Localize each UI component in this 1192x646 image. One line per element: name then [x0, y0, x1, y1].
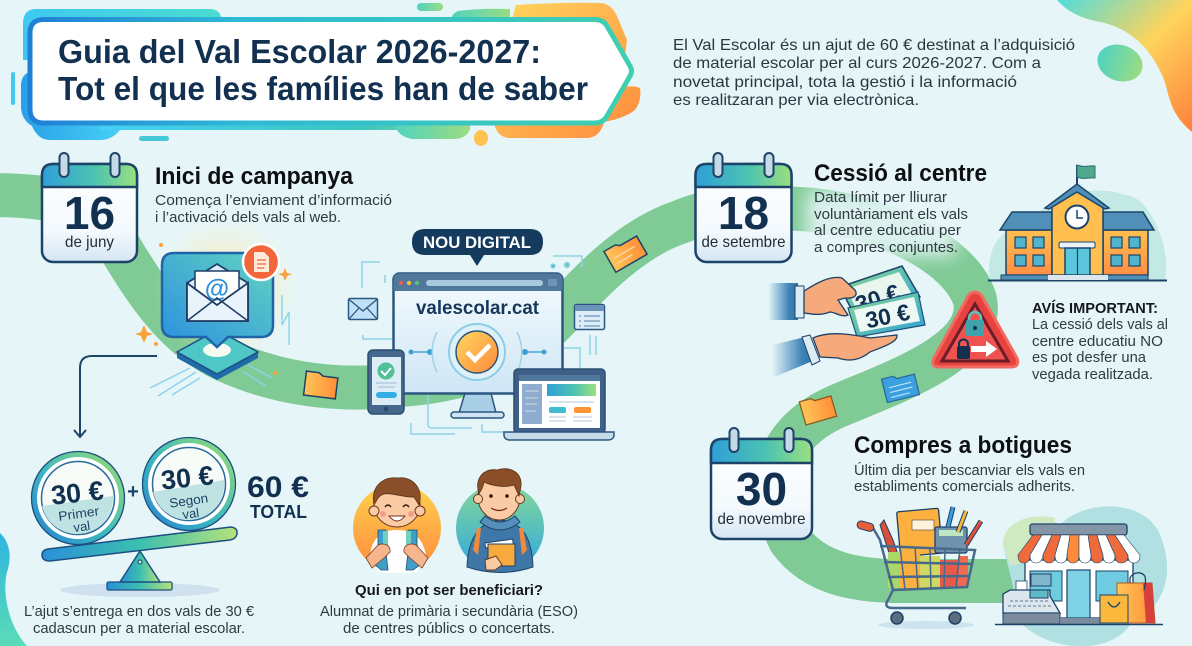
text: Compres a botigues description: Últim dia per bescanviar els vals en: [854, 462, 1085, 479]
title text: Tot el que les famílies han de saber: [58, 70, 588, 107]
illustration: hands exchanging vouchers: [768, 266, 925, 378]
seesaw: [42, 527, 237, 597]
total: 60 €: TOTAL: [250, 502, 307, 522]
title banner: [11, 3, 640, 146]
decorative blob: top right corner: [1057, 0, 1192, 132]
calendar: 18 de setembre: 18: [718, 187, 769, 239]
text: avís important: centre educatiu NO: [1032, 333, 1163, 350]
desktop monitor: [394, 274, 562, 418]
voucher: segon val: val: [182, 505, 200, 522]
illustration: seesaw with vouchers: [32, 438, 237, 597]
decorative blob: bottom left corner: [0, 533, 27, 646]
voucher: primer val: 30 €: [50, 475, 105, 511]
text: Cessió al centre description: al centre educatiu per: [814, 222, 961, 239]
envelope: @: [205, 275, 229, 303]
heading: Compres a botigues: Compres a botigues: [854, 432, 1072, 459]
network connectors: [362, 256, 596, 434]
calendar: 18 de setembre: [696, 153, 792, 262]
callout: NOU DIGITAL: [412, 229, 543, 266]
back voucher: [840, 266, 920, 322]
calendar: 18 de setembre: de setembre: [702, 234, 786, 251]
envelope: [187, 264, 248, 321]
title decorative shapes: [11, 3, 640, 146]
text: vouchers caption: [24, 603, 255, 637]
cart frame: [873, 528, 975, 608]
phone: [368, 350, 404, 414]
icon: small window: [574, 304, 604, 330]
total: 60 €: 60 €: [247, 471, 309, 504]
voucher: segon val: 30 €: [160, 460, 215, 496]
calendar: 30 de novembre: de novembre: [718, 511, 806, 528]
voucher: segon val: Segon: [168, 490, 209, 511]
dark lock: [957, 340, 970, 359]
icon: small envelope: [348, 298, 378, 320]
check badge: [408, 324, 546, 380]
text: Inici de campanya description: [155, 192, 392, 226]
text: vouchers caption: cadascun per a material escolar.: [33, 620, 245, 637]
illustration: secondary school child: [456, 469, 544, 572]
heading: Cessió al centre: Cessió al centre: [814, 160, 987, 187]
heading: Inici de campanya: Inici de campanya: [155, 163, 354, 190]
text: avís important: vegada realitzada.: [1032, 366, 1153, 383]
cash register: [1003, 574, 1100, 624]
icon: email on platform: [135, 218, 297, 396]
icon: shopping cart: [856, 507, 981, 629]
plus sign: +: [127, 481, 139, 503]
text: who can benefit: Qui en pot ser beneficiari?: [355, 582, 543, 599]
text: avís important: es pot desfer una: [1032, 349, 1147, 366]
voucher: primer val: val: [73, 518, 91, 535]
total: 60 €: [247, 471, 309, 522]
text: Inici de campanya description: Comença l’enviament d’informació: [155, 192, 392, 209]
icon: warning triangle: [933, 292, 1018, 367]
callout: NOU DIGITAL: NOU DIGITAL: [423, 233, 531, 252]
green timeline road: [0, 195, 1040, 581]
intro paragraph: de material escolar per al curs 2026-2027. Com a: [673, 55, 1041, 72]
text: Cessió al centre description: a compres conjuntes.: [814, 239, 958, 256]
text: who can benefit: de centres públics o concertats.: [343, 620, 555, 637]
intro paragraph: es realitzaran per via electrònica.: [673, 92, 919, 109]
icon: school: [988, 165, 1167, 280]
text: avís important: [1032, 300, 1168, 383]
calendar: 30 de novembre: 30: [736, 463, 787, 515]
text: vouchers caption: L’ajut s’entrega en dos vals de 30 €: [24, 603, 255, 620]
icon: orange folder: [304, 371, 338, 399]
lower sleeve: [772, 337, 815, 378]
lower hand: [813, 334, 897, 360]
arrow: from email to vouchers: [74, 356, 157, 437]
voucher: primer val: Primer: [57, 503, 101, 524]
upper sleeve: [768, 283, 798, 320]
voucher: segon val: [142, 438, 236, 530]
laptop: [504, 369, 614, 440]
sparkles: [135, 243, 292, 375]
text: who can benefit: [320, 582, 578, 637]
platform: [150, 330, 272, 396]
text: Inici de campanya description: i l’activació dels vals al web.: [155, 209, 341, 226]
text: Cessió al centre description: [814, 189, 968, 256]
text: avís important: La cessió dels vals al: [1032, 316, 1168, 333]
text: Compres a botigues description: [854, 462, 1085, 495]
back voucher: 30 €: [852, 279, 903, 317]
icon: blue folder: [882, 371, 919, 403]
illustration: primary school child: [353, 478, 441, 573]
stand: [459, 393, 496, 413]
intro paragraph: El Val Escolar és un ajut de 60 € destinat a l’adquisició: [673, 37, 1075, 54]
text: Compres a botigues description: establiments comercials adherits.: [854, 478, 1075, 495]
icon: orange folder top: [604, 233, 647, 272]
text: Cessió al centre description: Data límit per lliurar: [814, 189, 947, 206]
icon: store: [995, 524, 1163, 624]
white arrow: [971, 341, 997, 357]
calendar: 30 de novembre: [711, 428, 812, 539]
text: who can benefit: Alumnat de primària i secundària (ESO): [320, 603, 578, 620]
text: Cessió al centre description: voluntàriament els vals: [814, 206, 968, 223]
title frame: [30, 20, 632, 123]
calendar: 16 de juny: [42, 153, 137, 262]
calendar: 16 de juny: de juny: [65, 234, 114, 251]
front voucher: 30 €: [863, 299, 912, 333]
title text: Guia del Val Escolar 2026-2027:: [58, 33, 541, 70]
intro paragraph: [673, 37, 1075, 109]
front voucher: [848, 292, 925, 337]
title text: [58, 33, 588, 107]
shopping bags: [1100, 573, 1155, 623]
voucher: primer val: [32, 452, 124, 544]
awning: [1018, 535, 1140, 563]
text: avís important: AVÍS IMPORTANT:: [1032, 300, 1158, 317]
speech bubble: [162, 253, 273, 347]
text fade over road: [806, 190, 956, 256]
calendar: 16 de juny: 16: [64, 187, 115, 239]
icon: store background blobs: [1003, 506, 1167, 646]
icon: orange folder lower: [799, 393, 837, 425]
cart contents: [880, 507, 981, 588]
decorative blob: small teal oval: [1093, 39, 1147, 87]
badge: document: [243, 244, 279, 280]
url: valescolar.cat: [416, 298, 540, 319]
upper hand: [804, 277, 856, 316]
intro paragraph: novetat principal, tota la gestió i la informació: [673, 74, 1017, 91]
teal lock: [966, 312, 984, 336]
